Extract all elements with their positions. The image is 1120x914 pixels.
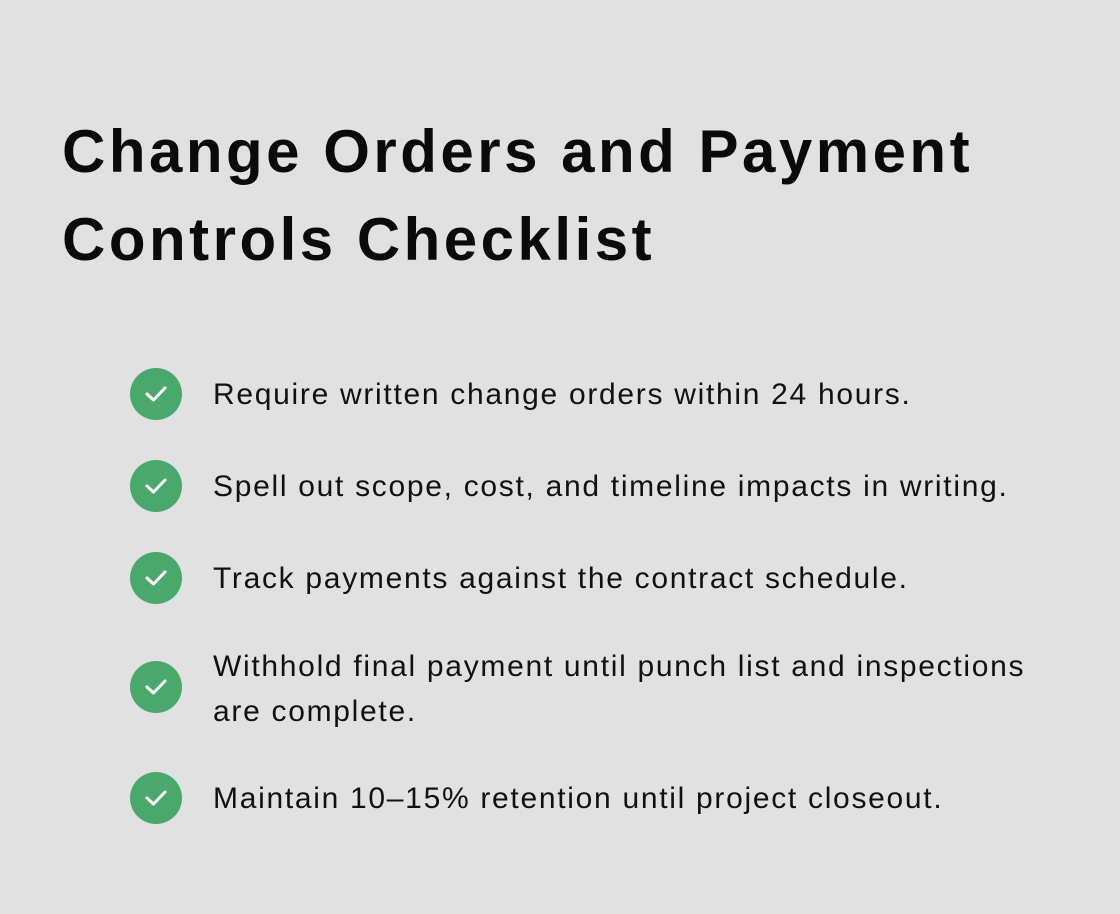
text [213,650,1025,728]
text: are complete. [213,695,417,728]
icon: check [130,460,182,512]
title: Controls Checklist [62,206,655,273]
text: Require written change orders within 24 hours. [213,378,912,411]
text: Spell out scope, cost, and timeline impacts in writing. [213,470,1008,503]
checklist item 2 [130,460,1008,512]
icon: check [130,552,182,604]
icon: check [130,368,182,420]
text: Withhold final payment until punch list and inspections [213,650,1025,683]
text: Track payments against the contract schedule. [213,562,909,595]
icon: check [130,661,182,713]
checklist item 3 [130,552,909,604]
title [62,118,973,273]
checklist item 1 [130,368,912,420]
text: Maintain 10–15% retention until project closeout. [213,782,943,815]
checklist item 5 [130,772,943,824]
checklist item 4 [130,650,1025,728]
title: Change Orders and Payment [62,118,973,185]
icon: check [130,772,182,824]
